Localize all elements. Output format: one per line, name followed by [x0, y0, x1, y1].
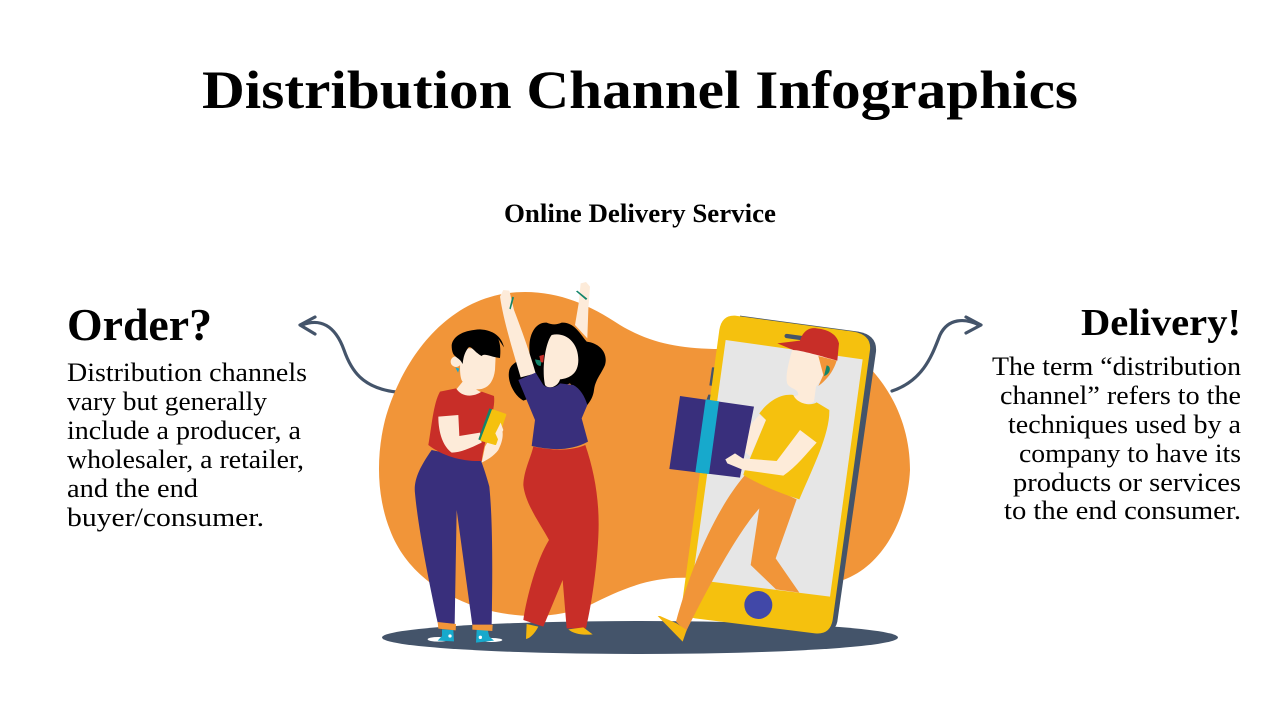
heading: delivery: Delivery!	[1081, 302, 1241, 344]
courier hair and ear	[818, 356, 837, 386]
tablet	[478, 408, 505, 444]
figure: woman cheering	[500, 282, 606, 639]
earring	[535, 359, 542, 366]
courier cap	[777, 328, 839, 361]
text block: order description: Distribution channels	[67, 358, 307, 387]
phone and courier	[658, 316, 876, 642]
trousers	[415, 450, 492, 625]
panel: delivery	[992, 302, 1241, 525]
speaker	[787, 336, 803, 338]
heading: order: Order?	[67, 300, 212, 350]
arrow: left	[300, 317, 396, 392]
shirt	[428, 388, 494, 461]
courier head	[787, 348, 837, 404]
folded arm	[438, 415, 482, 453]
hair	[452, 329, 504, 364]
phone shadow edge	[740, 316, 876, 633]
ground shadow	[382, 621, 898, 654]
courier near arm	[725, 430, 817, 476]
text block: delivery description: company to have its	[1019, 439, 1241, 468]
raised front arm	[500, 290, 536, 377]
text block: order description: include a producer, a	[67, 416, 301, 445]
text block: order description: vary but generally	[67, 387, 267, 416]
phone side buttons	[707, 367, 715, 400]
text block: delivery description: The term “distribution	[992, 352, 1241, 381]
title: Distribution Channel Infographics	[202, 60, 1078, 120]
home button	[744, 591, 772, 619]
subtitle: Online Delivery Service	[504, 199, 776, 228]
courier shirt	[743, 395, 829, 499]
far hand	[482, 423, 503, 463]
courier shoe	[658, 616, 687, 642]
courier legs	[676, 475, 799, 632]
text block: order description: buyer/consumer.	[67, 503, 264, 532]
parcel	[669, 396, 754, 478]
phone body	[682, 316, 870, 633]
text block: order description: wholesaler, a retailer,	[67, 445, 304, 474]
trousers	[523, 445, 599, 628]
hair	[509, 323, 606, 405]
blouse	[518, 373, 588, 449]
raised back arm	[575, 282, 590, 338]
text block: delivery description	[992, 352, 1241, 525]
text block: delivery description: techniques used by a	[1008, 410, 1241, 439]
earring	[455, 367, 459, 373]
courier far arm	[740, 415, 766, 457]
fingers	[495, 423, 503, 440]
shoes	[526, 624, 593, 639]
text block: delivery description: to the end consumer.	[1004, 496, 1241, 525]
neck and face	[457, 348, 496, 396]
panel: order	[67, 300, 307, 532]
phone screen	[693, 340, 863, 597]
figure: person with tablet	[415, 329, 505, 643]
text block: order description: and the end	[67, 474, 198, 503]
background blob	[379, 292, 910, 616]
arrow: right	[892, 317, 981, 391]
face	[544, 334, 578, 387]
bracelets	[509, 291, 587, 309]
text block: delivery description: channel” refers to the	[1000, 381, 1241, 410]
illustration: online delivery	[379, 282, 910, 654]
text block: delivery description: products or services	[1013, 468, 1241, 497]
text block: order description	[67, 358, 307, 532]
shoes	[428, 622, 502, 643]
